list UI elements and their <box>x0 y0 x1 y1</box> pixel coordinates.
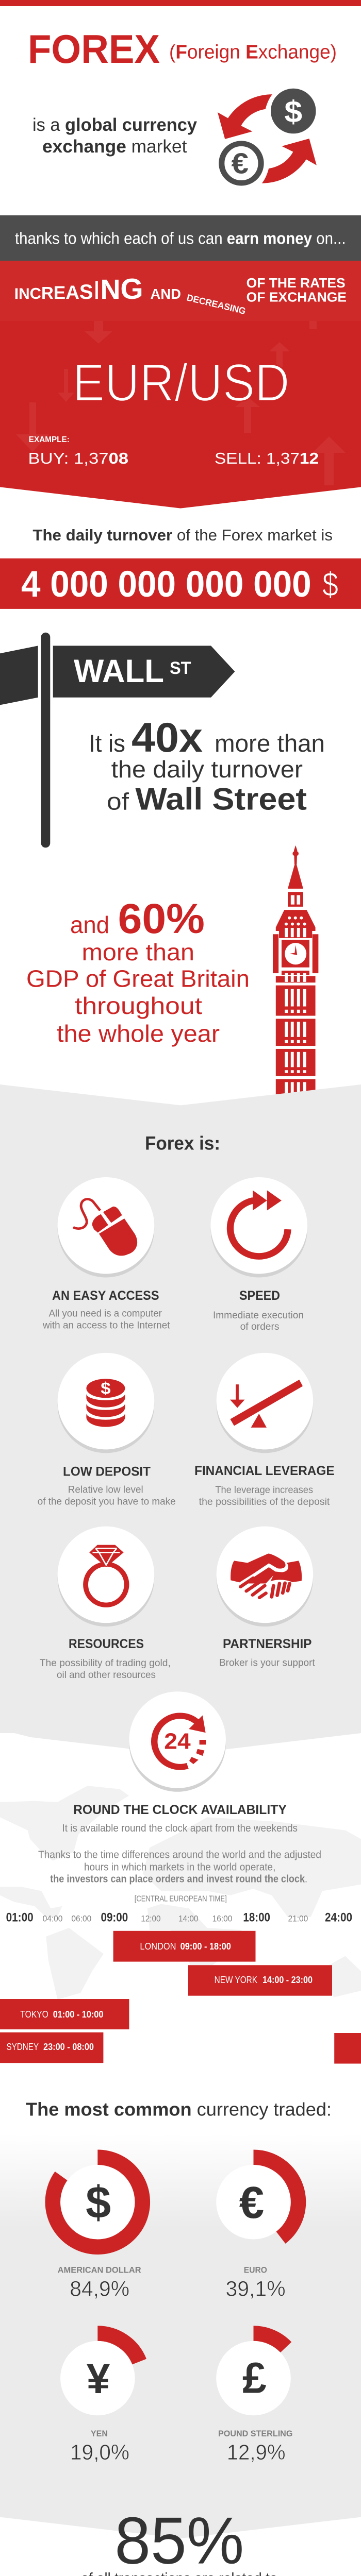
bar: sydney: 23:00 - 08:00 <box>43 2042 94 2052</box>
text: 40x more than wall street: It is <box>89 730 125 757</box>
panel: round the clock availability <box>0 1691 361 2064</box>
icon: diamond ring <box>86 1545 127 1605</box>
subtitle: Foreign Exchange: (Foreign Exchange) <box>169 42 337 63</box>
chart: yen 19.0% <box>60 2333 139 2464</box>
bar: new york: 14:00 - 23:00 <box>262 1975 313 1985</box>
timeline labels <box>6 1910 352 1924</box>
heading: increasing and decreasing: OF EXCHANGE <box>247 289 347 304</box>
text: 60% more than GDP of great britain: more than <box>81 939 194 965</box>
feature: partnership <box>217 1527 315 1668</box>
chart: pound sterling 12.9%: £ <box>242 2353 267 2402</box>
text: 60% more than GDP of great britain: GDP of Great Britain <box>26 965 250 992</box>
chart: yen 19.0%: YEN <box>91 2429 108 2438</box>
bar: london: 09:00 - 18:00 <box>180 1941 231 1952</box>
chart: pound sterling 12.9% <box>216 2333 292 2464</box>
feature: low deposit: of the deposit you have to make <box>38 1496 176 1507</box>
text: 40x more than wall street: Wall Street <box>135 782 307 816</box>
heading: increasing and decreasing <box>14 273 347 316</box>
panel: 85% seven pairs <box>28 2504 335 2576</box>
bar: tokyo <box>0 1999 129 2029</box>
feature: low deposit <box>38 1353 176 1507</box>
feature: speed: of orders <box>240 1321 280 1332</box>
feature: an easy access: AN EASY ACCESS <box>52 1289 159 1303</box>
bar: london <box>113 1931 256 1962</box>
title: FOREX: FOREX <box>28 26 160 72</box>
chart: american dollar 84.9% <box>53 2157 142 2301</box>
timeline labels: 21:00 <box>288 1913 308 1923</box>
text: 60% more than GDP of great britain: 60% <box>118 895 205 942</box>
feature: partnership: Broker is your support <box>219 1657 315 1668</box>
timeline labels: 18:00 <box>243 1910 270 1924</box>
text: 40x more than wall street: more than <box>215 730 325 757</box>
chart: euro 39.1%: EURO <box>244 2265 267 2275</box>
text: 60% more than GDP of great britain: and <box>70 911 109 938</box>
chart: euro 39.1%: 39,1% <box>226 2277 286 2301</box>
panel: EUR/USD rates <box>0 261 361 509</box>
feature: speed <box>210 1177 307 1332</box>
timeline labels: 06:00 <box>71 1913 91 1923</box>
text: availability description <box>38 1823 321 1904</box>
text: availability description: [CENTRAL EUROPEAN TIME] <box>135 1895 227 1904</box>
icon: big ben <box>273 845 318 1106</box>
panel: intro header <box>0 0 361 183</box>
band: 4 trillion dollars: 4 000 000 000 000 <box>21 564 311 605</box>
feature: partnership: PARTNERSHIP <box>223 1637 311 1651</box>
background arrows <box>16 321 346 485</box>
bar: sydney <box>0 2032 361 2064</box>
icon: mouse <box>73 1199 137 1256</box>
text: global currency exchange market: is a global currency <box>32 115 198 135</box>
icon: 24 hours <box>129 1691 226 1792</box>
chart: american dollar 84.9%: $ <box>86 2177 111 2228</box>
panel: forex is <box>0 1084 361 1755</box>
timeline labels: 04:00 <box>43 1913 62 1923</box>
chart: american dollar 84.9%: AMERICAN DOLLAR <box>58 2265 141 2275</box>
label: example: EXAMPLE: <box>29 435 70 444</box>
panel: GDP of great britain <box>26 845 318 1106</box>
band: 4 trillion dollars <box>0 558 361 609</box>
chart: pound sterling 12.9%: POUND STERLING <box>218 2429 292 2438</box>
bar: tokyo: TOKYO <box>20 2009 48 2020</box>
heading: increasing and decreasing: AND <box>151 286 181 302</box>
text: 40x more than wall street: the daily turnover <box>111 756 303 783</box>
feature: resources <box>40 1527 171 1681</box>
icon: handshake <box>231 1553 302 1598</box>
heading: most common currency traded: The most common currency traded: <box>26 2099 332 2120</box>
feature: low deposit: Relative low level <box>68 1485 143 1496</box>
text: availability description: the investors can place orders and invest round the clock. <box>50 1873 307 1885</box>
timeline labels: 12:00 <box>141 1913 161 1923</box>
chart: yen 19.0%: 19,0% <box>70 2440 129 2464</box>
text: 60% more than GDP of great britain <box>26 895 250 1047</box>
icon: currency exchange dollar euro: $ <box>284 95 302 129</box>
text: availability description: hours in which markets in the world operate, <box>84 1861 275 1873</box>
feature: low deposit: LOW DEPOSIT <box>63 1464 151 1479</box>
icon: speed arrow <box>230 1190 288 1257</box>
panel: wall street <box>0 633 325 848</box>
background: world map <box>0 1786 361 1999</box>
panel: earn money band <box>0 215 361 261</box>
heading: increasing and decreasing: INCREASING <box>14 273 143 306</box>
timeline labels: 14:00 <box>178 1913 198 1923</box>
icon: coin stack: $ <box>101 1379 111 1398</box>
icon: coin stack <box>86 1379 125 1427</box>
text: thanks to which each of us can earn money on: thanks to which each of us can earn money on... <box>15 229 346 247</box>
heading: forex is: Forex is: <box>145 1133 220 1154</box>
heading: EUR/USD: EUR/USD <box>73 353 290 412</box>
heading: increasing and decreasing: OF THE RATES <box>247 275 346 291</box>
icon: wall street sign: WALL <box>74 653 164 689</box>
icon: wall street sign: ST <box>170 658 191 678</box>
text: global currency exchange market: exchange market <box>42 137 187 157</box>
chart: euro 39.1%: € <box>239 2178 264 2228</box>
icon: currency exchange dollar euro <box>218 89 317 183</box>
chart: pound sterling 12.9%: 12,9% <box>227 2440 286 2464</box>
buy price: BUY: 1,37 08 <box>28 449 128 467</box>
sell price: SELL: 1,37 12 <box>215 449 319 467</box>
text: 40x more than wall street: of <box>107 788 129 815</box>
text: availability description: It is available round the clock apart from the weekends <box>62 1823 298 1834</box>
text: 40x more than wall street: 40x <box>132 715 203 761</box>
feature: speed: Immediate execution <box>213 1310 304 1321</box>
feature: speed: SPEED <box>239 1289 280 1303</box>
feature: an easy access: All you need is a computer <box>49 1308 162 1319</box>
text: global currency exchange market <box>32 115 198 157</box>
feature: financial leverage: FINANCIAL LEVERAGE <box>194 1464 335 1478</box>
panel: most common currency <box>0 2099 361 2538</box>
feature: an easy access: with an access to the Internet <box>42 1320 170 1331</box>
feature: financial leverage: The leverage increases <box>215 1485 313 1496</box>
bar: new york: NEW YORK <box>215 1975 257 1985</box>
bar: sydney: SYDNEY <box>6 2042 39 2052</box>
bar: new york <box>188 1965 332 1996</box>
text: availability description: Thanks to the time differences around the world and the adjusted <box>38 1849 321 1860</box>
feature: financial leverage: the possibilities of the deposit <box>199 1497 330 1507</box>
feature: resources: oil and other resources <box>57 1670 156 1681</box>
text: 40x more than wall street <box>89 715 325 816</box>
heading: increasing and decreasing: DECREASING <box>186 292 247 316</box>
feature: resources: The possibility of trading gold, <box>40 1658 171 1669</box>
timeline labels: 09:00 <box>101 1910 128 1924</box>
heading: round the clock availability: ROUND THE CLOCK AVAILABILITY <box>73 1803 287 1817</box>
feature: financial leverage <box>194 1353 335 1507</box>
timeline labels: 16:00 <box>212 1913 232 1923</box>
timeline labels: 24:00 <box>325 1910 352 1924</box>
band: 4 trillion dollars: $ <box>322 565 338 603</box>
text: 60% more than GDP of great britain: throughout <box>75 992 202 1019</box>
timeline labels: 01:00 <box>6 1910 34 1924</box>
chart: yen 19.0%: ¥ <box>87 2355 110 2402</box>
text: 60% more than GDP of great britain: the whole year <box>57 1020 220 1047</box>
stat: 85%: 85% <box>114 2504 244 2576</box>
panel: daily turnover <box>0 526 361 609</box>
icon: 24 hours: 24 <box>164 1729 191 1754</box>
icon: wall street sign <box>0 633 235 848</box>
icon: lever <box>230 1380 303 1428</box>
icon: currency exchange dollar euro: € <box>231 147 249 180</box>
bar: london: LONDON <box>140 1941 176 1952</box>
text: daily turnover of the forex market: The daily turnover of the Forex market is <box>32 526 333 544</box>
feature: an easy access <box>42 1177 170 1331</box>
bar: tokyo: 01:00 - 10:00 <box>53 2009 103 2020</box>
chart: american dollar 84.9%: 84,9% <box>70 2277 129 2301</box>
chart: euro 39.1% <box>216 2157 299 2301</box>
feature: resources: RESOURCES <box>69 1637 144 1651</box>
